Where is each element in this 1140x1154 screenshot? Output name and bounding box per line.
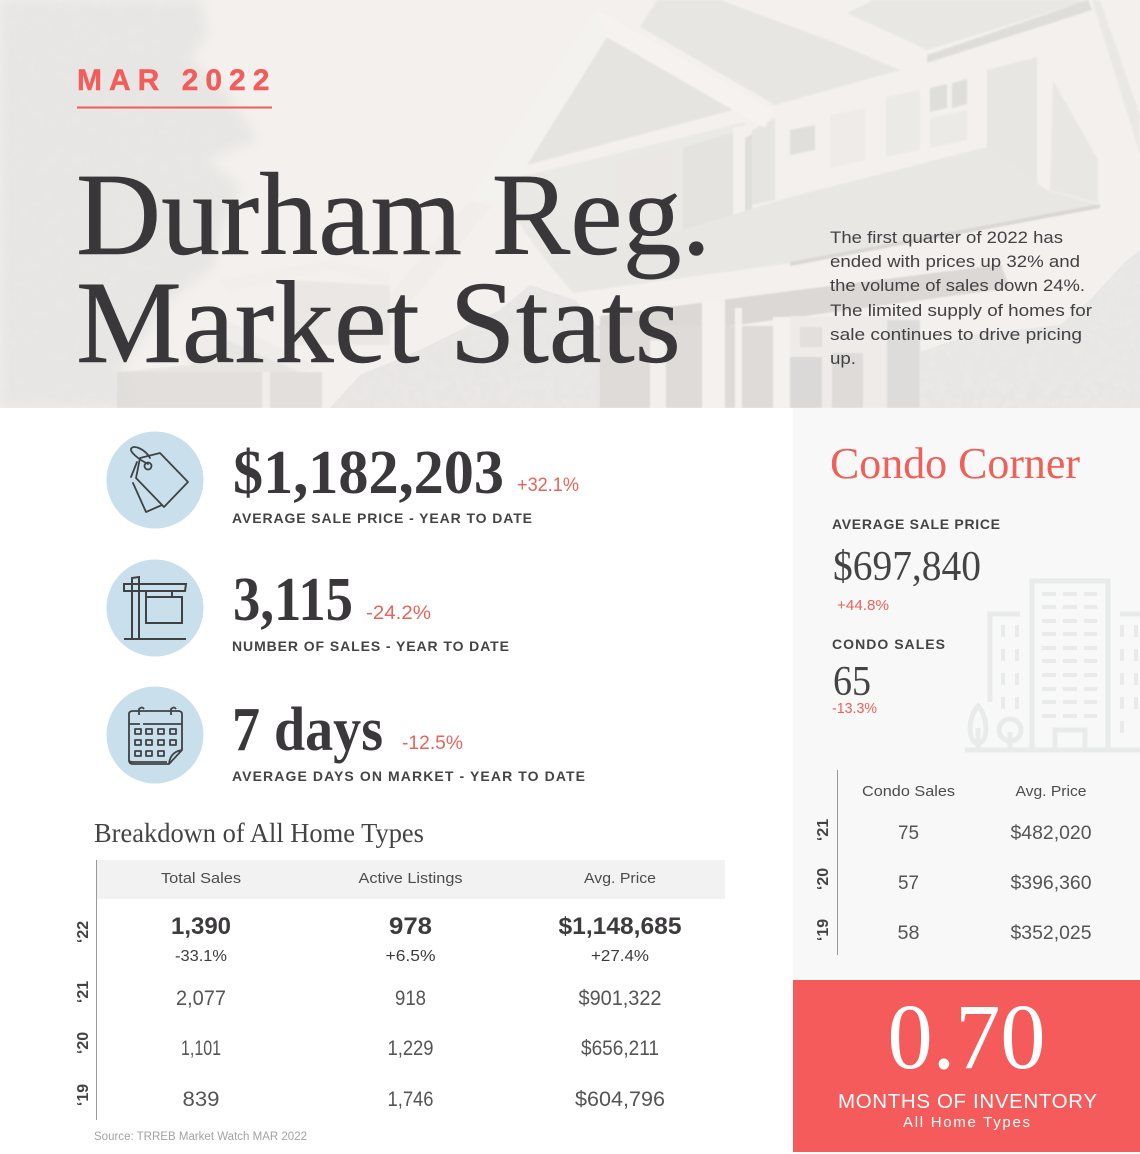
intro paragraph: sale continues to drive pricing bbox=[830, 325, 1082, 344]
condo table: Avg. Price bbox=[1016, 783, 1086, 800]
row 2022: $1,148,685 bbox=[558, 913, 682, 940]
panel: condo corner bbox=[793, 408, 1140, 980]
stat: number of sales: 3,115 bbox=[233, 566, 353, 634]
rows 2021 to 2019: 2,077 bbox=[176, 987, 226, 1010]
title bbox=[76, 149, 711, 388]
source note: Source: TRREB Market Watch MAR 2022 bbox=[94, 1131, 307, 1143]
condo table: ‘20 bbox=[815, 868, 832, 890]
panel: months of inventory: MONTHS OF INVENTORY bbox=[838, 1090, 1097, 1113]
stat: condo average sale price bbox=[832, 516, 1000, 614]
panel: months of inventory: All Home Types bbox=[903, 1114, 1030, 1131]
rows 2021 to 2019: 1,229 bbox=[388, 1037, 434, 1060]
stat: days on market: AVERAGE DAYS ON MARKET - YEAR TO DATE bbox=[232, 768, 585, 784]
condo table bbox=[815, 770, 1092, 955]
title: Market Stats bbox=[76, 257, 681, 388]
rows 2021 to 2019: $604,796 bbox=[575, 1088, 665, 1111]
icon: price tags bbox=[106, 432, 204, 528]
condo table: 75 bbox=[898, 823, 919, 844]
year labels: ‘21 bbox=[75, 981, 92, 1003]
panel: months of inventory bbox=[793, 980, 1140, 1152]
intro paragraph: ended with prices up 32% and bbox=[830, 252, 1080, 271]
intro paragraph: The limited supply of homes for bbox=[830, 301, 1092, 320]
rows 2021 to 2019: 918 bbox=[395, 987, 426, 1010]
intro paragraph bbox=[830, 228, 1092, 368]
stat: condo average sale price: +44.8% bbox=[837, 598, 889, 614]
icon: condo buildings bbox=[965, 581, 1140, 750]
condo table: Condo Sales bbox=[862, 783, 955, 800]
condo table: ‘19 bbox=[815, 919, 832, 941]
condo table: 58 bbox=[898, 923, 920, 944]
year labels bbox=[75, 921, 92, 1106]
stat: average sale price: AVERAGE SALE PRICE - YEAR TO DATE bbox=[232, 510, 532, 526]
table header: Avg. Price bbox=[584, 870, 656, 887]
rows 2021 to 2019: $901,322 bbox=[578, 987, 662, 1010]
row 2022: +6.5% bbox=[386, 948, 436, 965]
row 2022: 1,390 bbox=[171, 913, 231, 940]
stat: average sale price: $1,182,203 bbox=[233, 439, 504, 507]
rows 2021 to 2019: 839 bbox=[182, 1088, 220, 1111]
stat: condo sales: 65 bbox=[833, 659, 871, 705]
intro paragraph: The first quarter of 2022 has bbox=[830, 228, 1063, 247]
heading: breakdown: Breakdown of All Home Types bbox=[94, 818, 424, 848]
row 2022: 978 bbox=[389, 913, 432, 940]
rows 2021 to 2019: 1,746 bbox=[388, 1088, 434, 1111]
condo table: $352,025 bbox=[1010, 923, 1092, 944]
stat: days on market: -12.5% bbox=[402, 733, 463, 754]
stat: number of sales bbox=[106, 560, 509, 656]
stat: days on market: 7 days bbox=[232, 696, 383, 764]
table header: Active Listings bbox=[358, 870, 462, 887]
stat: average sale price bbox=[106, 432, 579, 528]
icon: calendar bbox=[106, 686, 204, 784]
year labels: ‘19 bbox=[75, 1084, 92, 1106]
stat: number of sales: NUMBER OF SALES - YEAR TO DATE bbox=[232, 638, 509, 654]
row 2022 bbox=[171, 913, 682, 965]
date label: MAR 2022 bbox=[77, 64, 276, 97]
stat: condo sales: -13.3% bbox=[832, 701, 877, 717]
intro paragraph: the volume of sales down 24%. bbox=[830, 276, 1085, 295]
hero photo background bbox=[0, 0, 1140, 408]
stat: days on market bbox=[106, 686, 585, 784]
title: Durham Reg. bbox=[76, 149, 711, 280]
stat: condo average sale price: AVERAGE SALE PRICE bbox=[832, 516, 1000, 532]
breakdown table bbox=[75, 860, 725, 1120]
condo table: 57 bbox=[898, 873, 919, 894]
table header: Total Sales bbox=[161, 870, 241, 887]
stat: condo sales: CONDO SALES bbox=[832, 636, 945, 652]
stat: condo sales bbox=[832, 636, 945, 717]
icon: for sale sign bbox=[106, 560, 204, 656]
rows 2021 to 2019: $656,211 bbox=[581, 1037, 659, 1060]
rows 2021 to 2019: 1,101 bbox=[181, 1037, 221, 1060]
heading: condo corner: Condo Corner bbox=[830, 439, 1080, 488]
row 2022: +27.4% bbox=[591, 948, 649, 965]
condo table: ‘21 bbox=[815, 819, 832, 841]
stat: number of sales: -24.2% bbox=[366, 603, 431, 624]
year labels: ‘20 bbox=[75, 1032, 92, 1054]
condo table: $396,360 bbox=[1010, 873, 1092, 894]
intro paragraph: up. bbox=[830, 349, 856, 368]
stat: condo average sale price: $697,840 bbox=[833, 544, 981, 590]
rows 2021 to 2019 bbox=[176, 987, 665, 1111]
table header bbox=[161, 870, 656, 887]
year labels: ‘22 bbox=[75, 921, 92, 943]
row 2022: -33.1% bbox=[175, 948, 227, 965]
condo table: $482,020 bbox=[1010, 823, 1092, 844]
stat: average sale price: +32.1% bbox=[517, 475, 579, 496]
panel: months of inventory: 0.70 bbox=[888, 986, 1046, 1089]
